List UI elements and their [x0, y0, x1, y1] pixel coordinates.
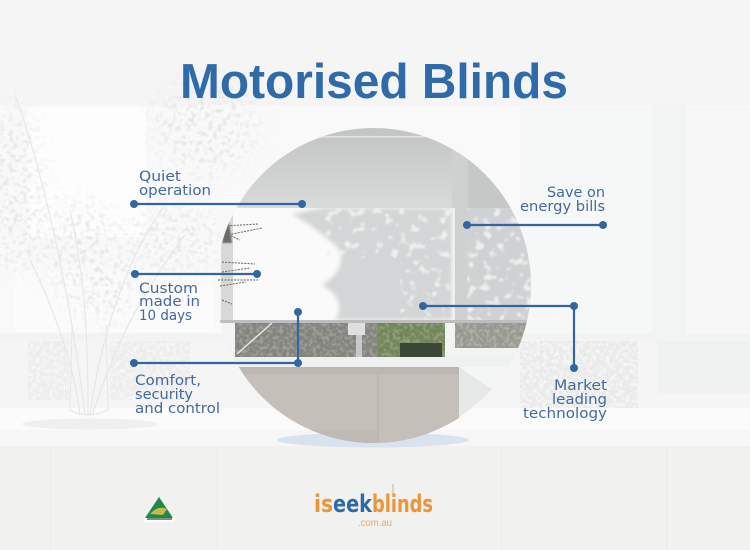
callout: market leading technology: leading	[552, 392, 607, 408]
leaf shadow on blind	[292, 208, 452, 320]
callout: market leading technology: Market	[554, 378, 607, 394]
window frame column	[452, 150, 468, 320]
callout: market leading technology: technology	[523, 406, 607, 422]
logo: iseekblinds: .com.au	[358, 518, 392, 529]
icon: Australian made logo	[144, 497, 175, 522]
infographic canvas	[0, 62, 668, 550]
faded vase with branches	[0, 77, 257, 415]
callout: custom made in 10 days: made in	[139, 294, 200, 310]
callout: custom made in 10 days	[131, 270, 261, 324]
callout: quiet operation	[130, 169, 306, 208]
right blind section with dappled light	[467, 208, 537, 320]
faded window panes	[28, 341, 750, 408]
countertop	[215, 357, 535, 367]
callout: save on energy bills	[463, 185, 607, 229]
grey cabinets	[230, 367, 459, 447]
callout: quiet operation: operation	[139, 183, 211, 199]
callout: custom made in 10 days: Custom	[139, 281, 198, 297]
title: Motorised Blinds	[180, 55, 568, 109]
callout: comfort, security and control: and control	[135, 401, 220, 417]
roller blind	[236, 208, 511, 209]
callout: save on energy bills: energy bills	[520, 199, 605, 215]
ground shadow below circle	[277, 432, 469, 448]
callout: custom made in 10 days: 10 days	[139, 308, 192, 324]
logo: iseekblinds: is	[314, 490, 333, 518]
upper wall	[236, 128, 509, 208]
callout: quiet operation: Quiet	[139, 169, 181, 185]
branch silhouettes	[218, 224, 262, 304]
blind bottom rail	[215, 320, 535, 323]
callout: market leading technology	[419, 302, 607, 422]
logo: iseekblinds: blinds	[372, 490, 433, 518]
callout: comfort, security and control: Comfort,	[135, 373, 201, 389]
window view	[215, 323, 535, 359]
circular photo of motorised blind	[210, 125, 540, 447]
logo: iseekblinds: eek	[333, 490, 373, 518]
callout: comfort, security and control	[130, 308, 302, 417]
logo: iseekblinds	[314, 484, 433, 529]
left wall strip	[212, 208, 221, 358]
callout: comfort, security and control: security	[135, 387, 193, 403]
callout: save on energy bills: Save on	[547, 185, 605, 201]
